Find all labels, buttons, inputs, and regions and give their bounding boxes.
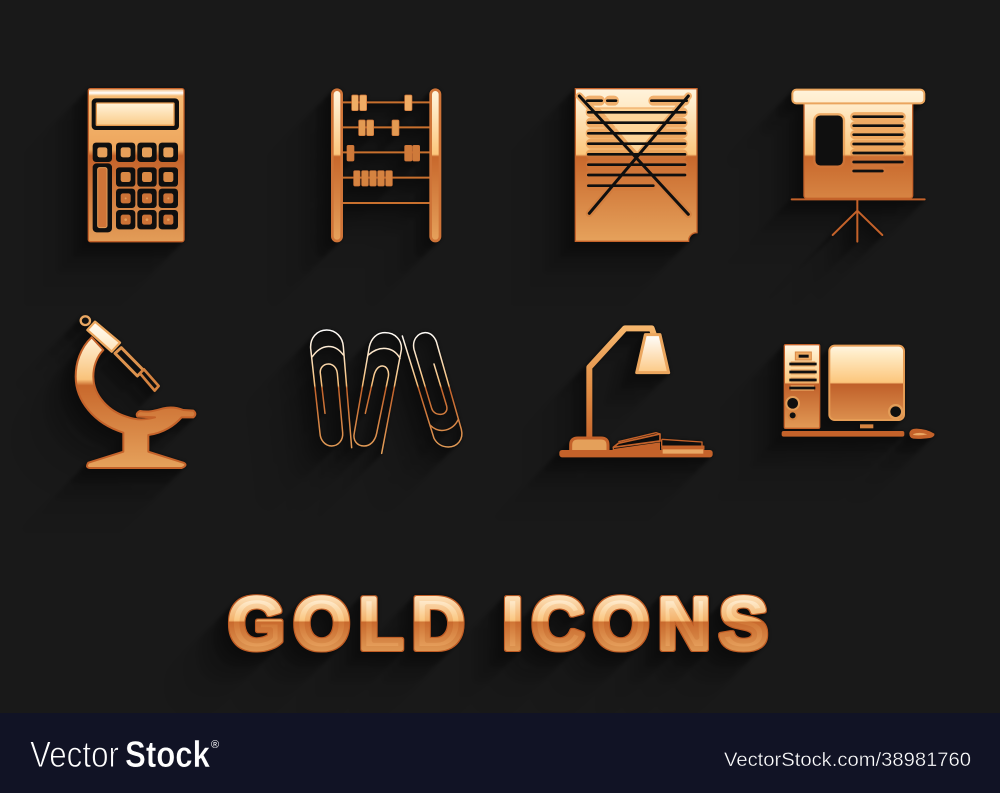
lamp base <box>571 438 608 452</box>
mouse <box>909 429 934 439</box>
VectorStock logo: Stock <box>125 734 210 775</box>
VectorStock logo <box>30 734 219 775</box>
image id: VectorStock.com/38981760 <box>724 750 971 771</box>
VectorStock logo: ® <box>211 739 219 751</box>
microscope eyepiece and tube <box>81 316 159 391</box>
calculator keypad <box>93 143 178 232</box>
shelf <box>559 450 713 457</box>
lamp shade <box>637 335 669 373</box>
title: GOLD ICONS <box>228 584 768 664</box>
cross mark <box>579 96 688 214</box>
document text lines <box>587 101 687 186</box>
icon: desktop computer <box>782 345 934 439</box>
paper clip 1 <box>311 330 352 448</box>
desk line <box>782 431 904 437</box>
books <box>613 433 704 454</box>
VectorStock logo: Vector <box>30 734 119 775</box>
footer banner <box>0 713 1000 793</box>
computer monitor <box>829 346 904 420</box>
computer tower <box>784 345 820 428</box>
board text lines <box>854 117 902 171</box>
abacus beads <box>347 95 420 186</box>
icon: desk lamp with books <box>559 328 713 457</box>
icon: calculator <box>88 89 184 242</box>
icon: presentation board <box>792 90 925 242</box>
icon: microscope <box>76 316 195 468</box>
icon: paper clips <box>311 330 462 453</box>
icon: crossed-out document <box>575 89 697 241</box>
monitor stand <box>860 424 873 428</box>
calculator screen <box>92 98 179 130</box>
paper clip 2 <box>354 333 401 453</box>
icon: abacus <box>332 90 440 241</box>
paper clip 3 <box>402 333 462 447</box>
board image placeholder <box>814 114 844 167</box>
